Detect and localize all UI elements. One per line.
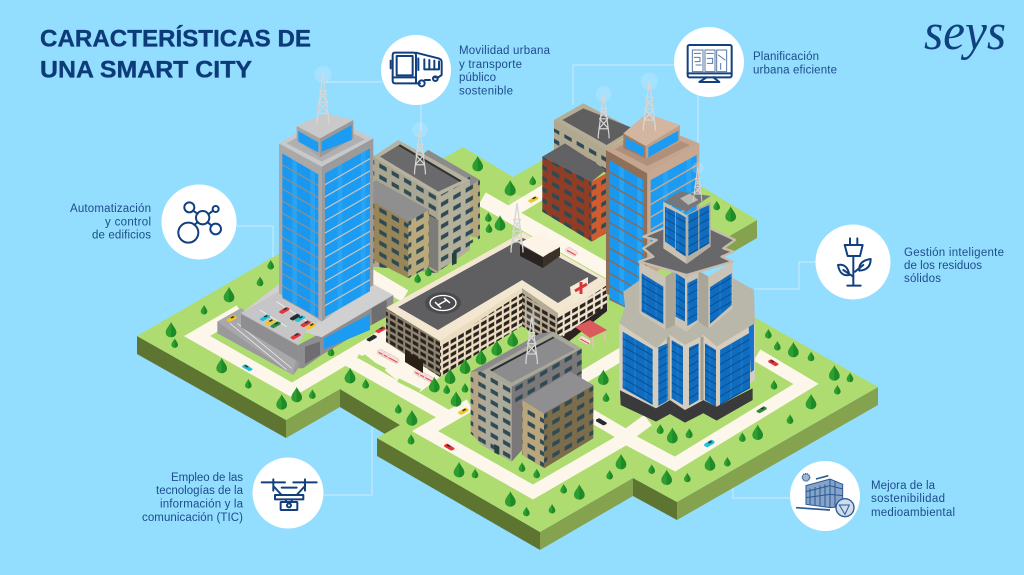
top tier xyxy=(663,192,711,264)
text: y transporte xyxy=(459,59,522,71)
icon: plug plant xyxy=(816,224,890,300)
text: de los residuos xyxy=(904,260,982,272)
icon: monitor xyxy=(674,27,744,97)
building: tan block xyxy=(373,181,432,283)
callout: sostenibilidad xyxy=(790,461,955,531)
text: sostenibilidad xyxy=(871,493,945,505)
stair house xyxy=(519,233,560,268)
podium xyxy=(217,283,393,375)
building: lower office south xyxy=(471,309,593,468)
title: UNA SMART CITY xyxy=(40,56,252,84)
building: main glass tower with podium xyxy=(217,66,393,375)
text: Gestión inteligente xyxy=(904,247,1004,259)
tower shaft xyxy=(279,115,373,322)
text: sólidos xyxy=(904,273,941,285)
text: público xyxy=(459,72,496,84)
entrance canopy xyxy=(575,320,607,348)
callout: TIC xyxy=(142,458,324,528)
parked cars xyxy=(227,307,316,340)
callout: planificación xyxy=(674,27,837,97)
helipad xyxy=(425,292,461,314)
text: comunicación (TIC) xyxy=(142,512,243,524)
text: de edificios xyxy=(92,230,151,242)
penthouse xyxy=(297,113,353,157)
trees north east xyxy=(505,176,853,443)
building: grey office north west xyxy=(373,122,480,273)
text: tecnologías de la xyxy=(156,485,244,497)
building: red block xyxy=(542,86,611,242)
text: Automatización xyxy=(70,203,151,215)
text xyxy=(142,472,244,524)
middle tier xyxy=(639,228,735,332)
text: medioambiental xyxy=(871,507,955,519)
roads xyxy=(197,188,806,492)
cars east xyxy=(528,196,778,447)
text: Movilidad urbana xyxy=(459,45,551,57)
title xyxy=(40,24,311,84)
callout: gestión residuos xyxy=(816,224,1004,300)
text: sostenible xyxy=(459,86,513,98)
building: back office north xyxy=(554,103,635,187)
text xyxy=(459,45,551,98)
text: y control xyxy=(105,216,151,228)
icon: bus xyxy=(381,35,451,105)
callout: automatización xyxy=(70,184,236,260)
trees in front of hospital xyxy=(345,331,518,407)
ground platform xyxy=(137,125,878,550)
trees south and east xyxy=(395,370,731,516)
logo seys: seys xyxy=(924,4,1006,61)
cars on roads xyxy=(242,326,468,451)
connector lines xyxy=(237,65,817,498)
text: Empleo de las xyxy=(171,472,243,484)
cars south xyxy=(444,408,714,451)
title: CARACTERÍSTICAS DE xyxy=(40,24,311,52)
icon: green building xyxy=(790,461,860,531)
text: Planificación xyxy=(753,51,819,63)
icon: drone xyxy=(252,458,324,528)
building: hospital xyxy=(386,195,607,377)
text xyxy=(871,480,955,519)
trees on ground xyxy=(166,156,515,445)
icon: network nodes xyxy=(162,184,236,260)
text xyxy=(753,51,837,76)
text xyxy=(904,247,1004,285)
text xyxy=(70,203,151,242)
parking green strips xyxy=(358,356,420,391)
text: Mejora de la xyxy=(871,480,936,492)
building: blue tan tower xyxy=(606,73,699,317)
text: urbana eficiente xyxy=(753,64,837,76)
red cross sign xyxy=(570,277,588,305)
lower tier xyxy=(619,278,755,410)
callout: movilidad urbana xyxy=(381,35,551,105)
building: large stepped tower xyxy=(619,162,755,423)
text: información y la xyxy=(160,498,244,510)
